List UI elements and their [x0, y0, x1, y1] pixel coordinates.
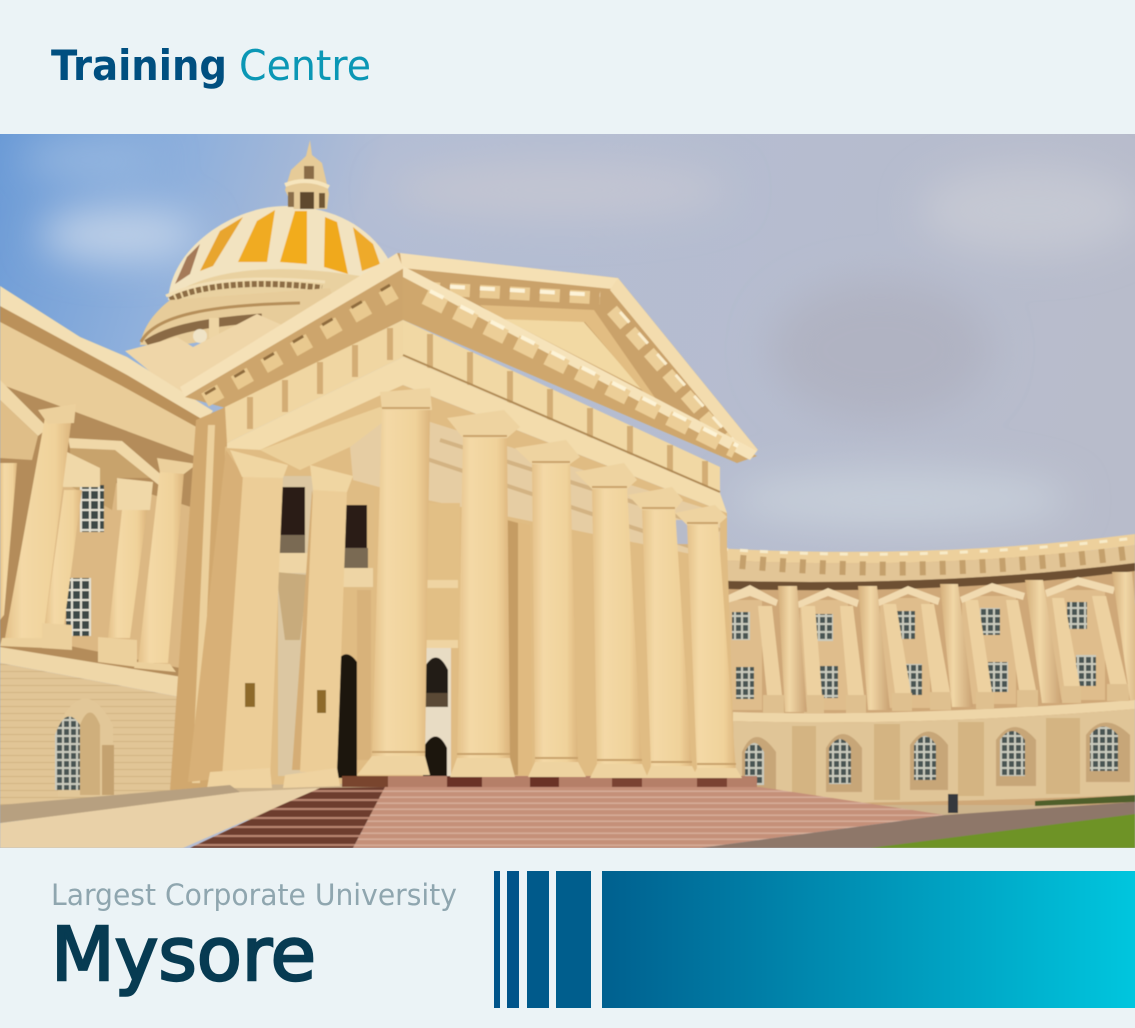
- left wing window pediments: [0, 380, 165, 510]
- right wing stone piers: [792, 718, 1080, 800]
- right wing window bays: [724, 590, 1105, 710]
- pilaster recess with windows: [267, 476, 374, 778]
- gradient bars: [494, 871, 1135, 1008]
- lantern on dome: [285, 140, 329, 209]
- subtitle: Largest Corporate University: [51, 878, 457, 912]
- roof terrace: [125, 314, 282, 395]
- forecourt: [700, 802, 1135, 848]
- right wing window pediments: [722, 577, 1115, 608]
- right wing large columns: [778, 572, 1135, 712]
- left wing column caps and pedestals: [0, 404, 197, 672]
- right wing wall: [726, 534, 1135, 805]
- title: Centre: [239, 41, 371, 90]
- grand stairs: [190, 776, 945, 848]
- photo: training centre building: [0, 134, 1135, 848]
- dome drum: [140, 288, 335, 345]
- right wing small columns: [758, 596, 1127, 695]
- pediment: [397, 253, 758, 463]
- main columns: [357, 388, 742, 778]
- hedge: [1035, 795, 1135, 806]
- ground behind building: [0, 780, 1135, 820]
- pilaster 2: [283, 465, 353, 788]
- lawn: [870, 814, 1135, 848]
- location name: Mysore: [51, 912, 316, 998]
- right wing arched windows: [745, 726, 1118, 785]
- left wing windows: [66, 448, 149, 636]
- left wing columns: [0, 412, 184, 663]
- right wing windows upper: [732, 602, 1096, 700]
- portico frieze left: [225, 320, 403, 450]
- title: Training: [51, 41, 227, 90]
- left wing: [0, 286, 213, 808]
- right wing column pedestals: [763, 684, 1129, 713]
- title: [51, 41, 371, 90]
- pilaster 1: [188, 450, 288, 788]
- ramp kerb: [0, 785, 240, 823]
- right wing arched recesses: [742, 722, 1130, 792]
- left wing lower arched window: [55, 698, 114, 797]
- dome: [166, 206, 390, 305]
- portico side wall: [170, 405, 232, 790]
- seated person: [948, 794, 958, 813]
- sky with clouds: [0, 134, 1135, 848]
- ramp: [0, 788, 320, 848]
- portico frieze front: [403, 266, 757, 513]
- portico interior: [225, 385, 735, 785]
- portico left cornice: [180, 253, 404, 408]
